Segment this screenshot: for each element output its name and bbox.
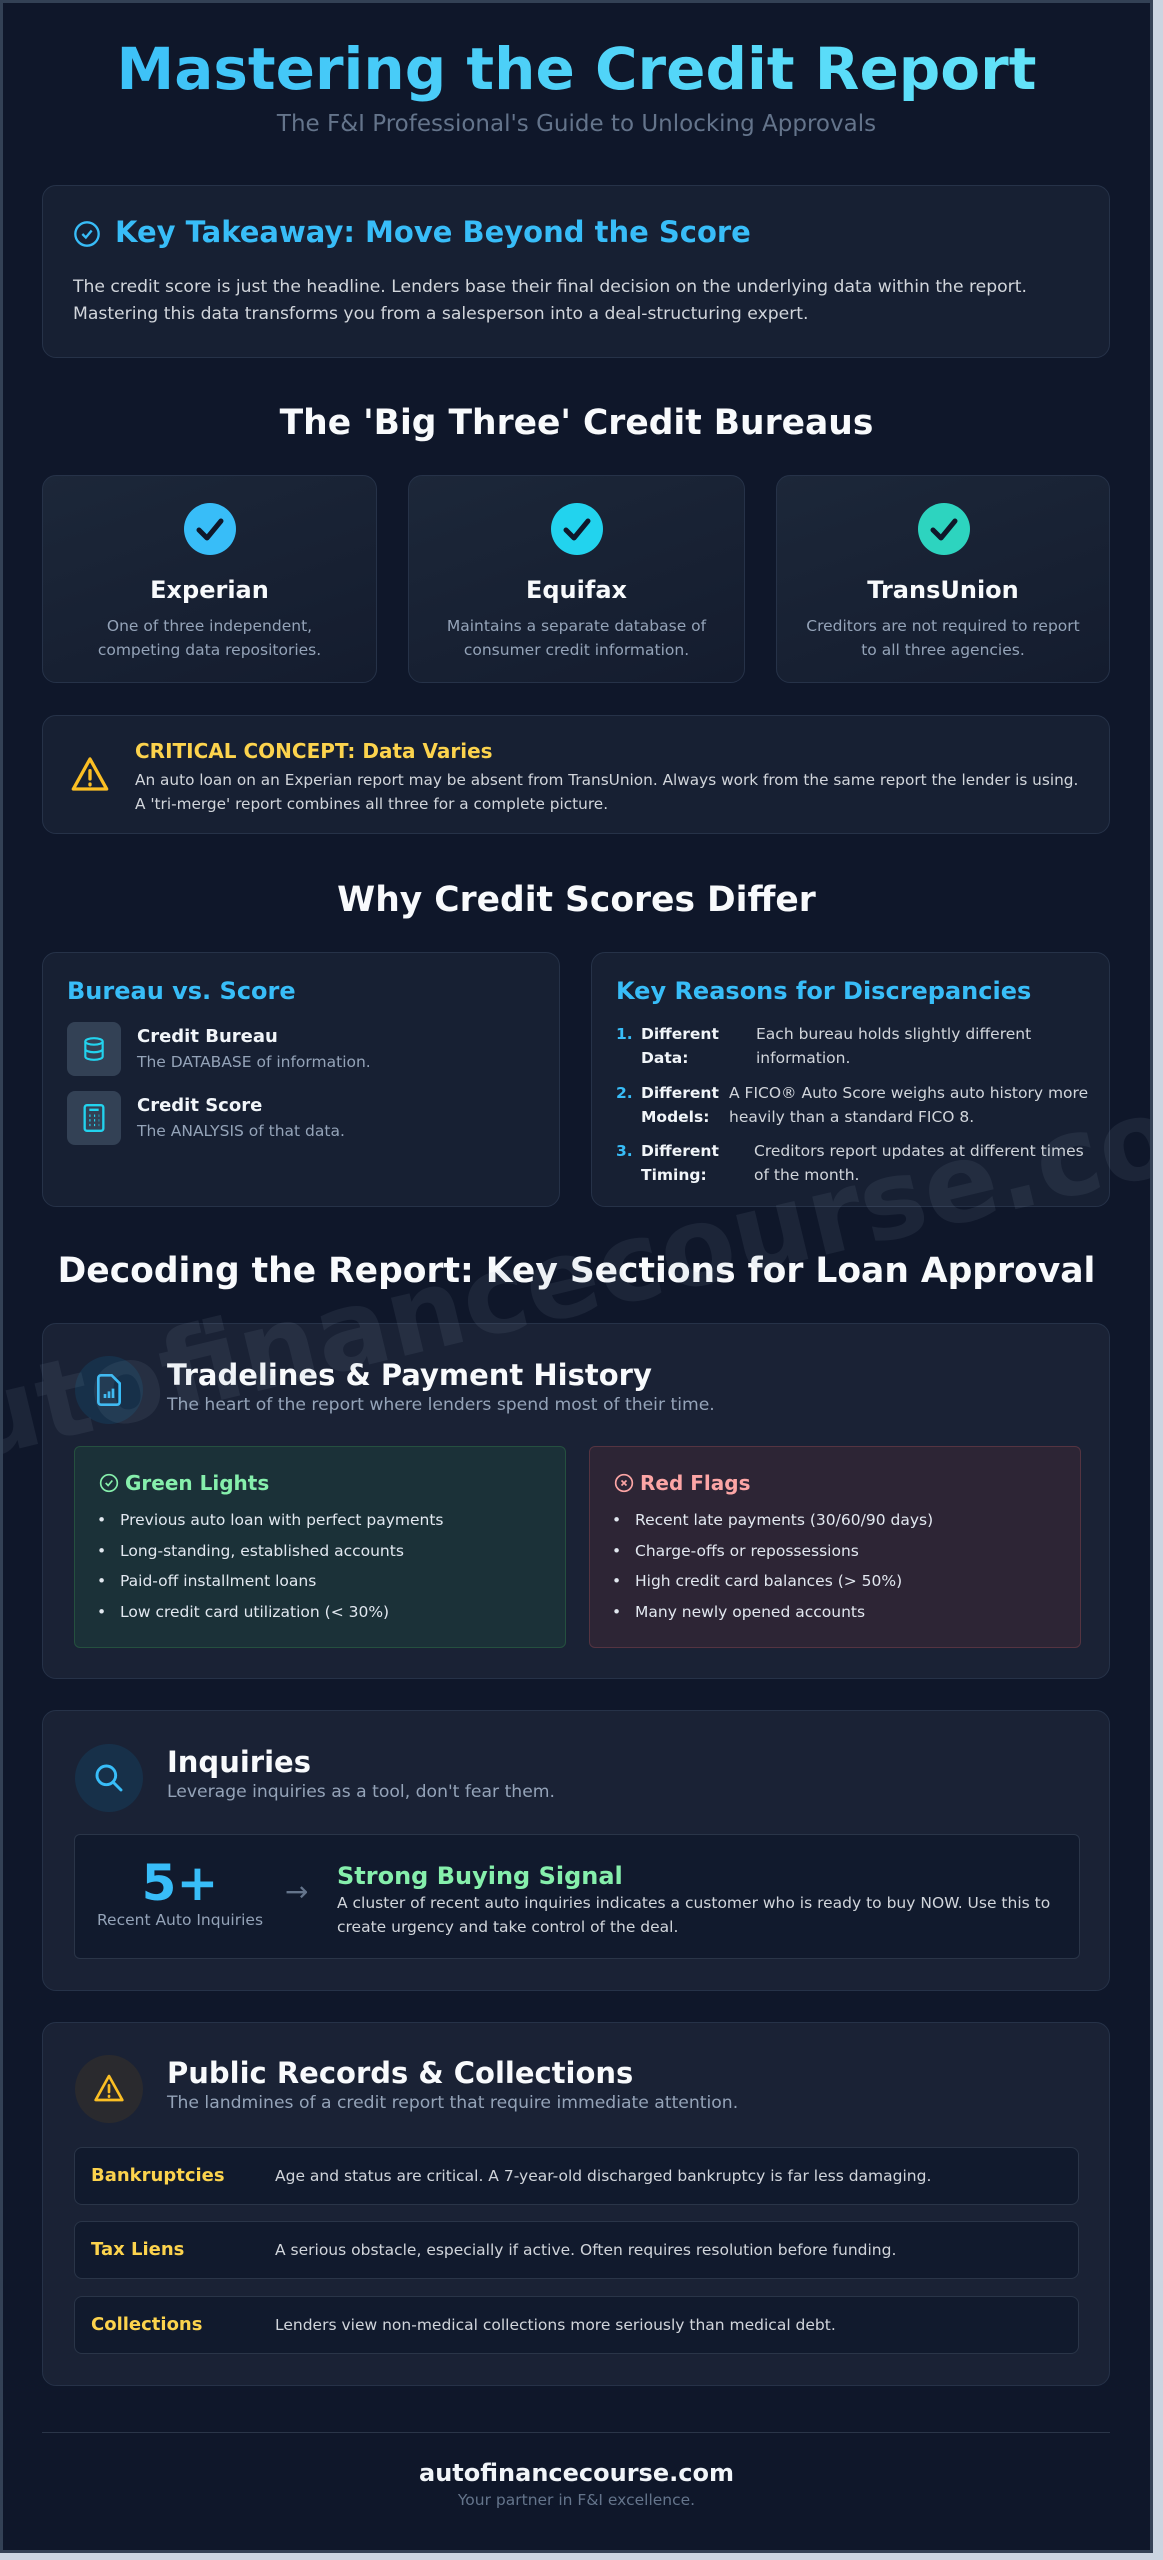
heading: why scores differ: Why Credit Scores Differ (337, 880, 816, 920)
arrow: → (285, 1875, 308, 1908)
panel: transunion (776, 475, 1110, 683)
reason 3: Different (641, 1142, 719, 1160)
desc: One of three independent, (107, 617, 312, 635)
list: Paid-off installment loans (120, 1572, 316, 1590)
reason 3 (616, 1142, 1084, 1184)
list: Recent late payments (30/60/90 days) (635, 1511, 933, 1529)
callout: critical concept (42, 715, 1110, 834)
list: Charge-offs or repossessions (635, 1542, 859, 1560)
callout: buying signal (74, 1834, 1080, 1959)
subtitle: The landmines of a credit report that require immediate attention. (167, 2093, 738, 2113)
text (135, 771, 1078, 813)
heading: decoding: Decoding the Report: Key Sections for Loan Approval (58, 1251, 1095, 1291)
icon: check (551, 503, 603, 555)
heading: Key Takeaway: Move Beyond the Score (115, 215, 751, 249)
heading: Key Reasons for Discrepancies (616, 977, 1031, 1005)
list (614, 1511, 933, 1620)
subtitle: Leverage inquiries as a tool, don't fear them. (167, 1782, 555, 1802)
icon: calculator (67, 1091, 121, 1145)
row: bankruptcies (74, 2147, 1079, 2205)
reason 1 (616, 1025, 1031, 1067)
stat: 5+ (97, 1854, 263, 1929)
subtitle: The heart of the report where lenders spend most of their time. (167, 1395, 715, 1415)
item: credit bureau: Credit Bureau (137, 1026, 278, 1047)
reason 1: Each bureau holds slightly different (756, 1025, 1031, 1043)
reason 2: heavily than a standard FICO 8. (729, 1108, 974, 1126)
item: credit score: Credit Score (137, 1095, 262, 1116)
name: Equifax (526, 576, 627, 604)
icon: database (67, 1022, 121, 1076)
desc: consumer credit information. (464, 641, 689, 659)
list: Long-standing, established accounts (120, 1542, 404, 1560)
list: Many newly opened accounts (635, 1602, 865, 1620)
reason 1: information. (756, 1049, 850, 1067)
desc (447, 617, 706, 659)
panel: tradelines (42, 1323, 1110, 1679)
reason 2 (616, 1084, 1088, 1126)
panel: green lights (74, 1446, 566, 1648)
list: Low credit card utilization (< 30%) (120, 1602, 389, 1620)
heading: Red Flags (640, 1471, 750, 1495)
row: tax liens (74, 2221, 1079, 2279)
panel: experian (42, 475, 377, 683)
subtitle: The F&I Professional's Guide to Unlocking Approvals (277, 111, 876, 137)
heading: big three: The 'Big Three' Credit Bureaus (280, 403, 873, 443)
reason 1: Data: (641, 1049, 688, 1067)
reason 1: 1. (616, 1025, 633, 1043)
panel: key takeaway (42, 185, 1110, 358)
row: collections (74, 2296, 1079, 2354)
desc (98, 617, 321, 659)
text: An auto loan on an Experian report may be absent from TransUnion. Always work from the same report the lender is using. (135, 771, 1078, 789)
reason 2: Models: (641, 1108, 709, 1126)
list (99, 1511, 443, 1620)
heading: Bureau vs. Score (67, 977, 296, 1005)
list: High credit card balances (> 50%) (635, 1572, 902, 1590)
icon: check (918, 503, 970, 555)
row: collections: Collections (91, 2314, 202, 2335)
title: Public Records & Collections (167, 2056, 633, 2090)
reason 2: 2. (616, 1084, 633, 1102)
item: credit score: The ANALYSIS of that data. (137, 1122, 345, 1140)
panel: equifax (408, 475, 745, 683)
panel: bureau vs score (42, 952, 560, 1207)
icon: check circle (74, 221, 100, 247)
footer (419, 2459, 734, 2509)
title: CRITICAL CONCEPT: Data Varies (135, 739, 493, 763)
reason 2: A FICO® Auto Score weighs auto history more (729, 1084, 1088, 1102)
desc: competing data repositories. (98, 641, 321, 659)
list: Previous auto loan with perfect payments (120, 1511, 443, 1529)
icon: document chart (75, 1356, 143, 1424)
reason 2: Different (641, 1084, 719, 1102)
reason 3: Timing: (641, 1166, 707, 1184)
panel: red flags (589, 1446, 1081, 1648)
icon: warning (75, 2055, 143, 2123)
text: The credit score is just the headline. Lenders base their final decision on the underlying data within the report. Mastering this data transforms you from a salesperson into a deal-structuring expert. (73, 277, 1027, 324)
desc: to all three agencies. (861, 641, 1025, 659)
reason 3: 3. (616, 1142, 633, 1160)
panel: key reasons (591, 952, 1110, 1207)
name: Experian (150, 576, 269, 604)
reason 3: of the month. (754, 1166, 859, 1184)
heading: Green Lights (125, 1471, 269, 1495)
title: Mastering the Credit Report (116, 35, 1036, 103)
title: Inquiries (167, 1745, 311, 1779)
item: credit bureau: The DATABASE of information. (137, 1053, 371, 1071)
panel: public records (42, 2022, 1110, 2386)
desc: Creditors are not required to report (806, 617, 1080, 635)
desc (806, 617, 1080, 659)
row: tax liens: A serious obstacle, especially if active. Often requires resolution before funding. (275, 2241, 896, 2259)
icon: warning (72, 757, 108, 791)
name: TransUnion (867, 576, 1019, 604)
desc: Maintains a separate database of (447, 617, 706, 635)
stat: 5+: Recent Auto Inquiries (97, 1911, 263, 1929)
reason 3: Creditors report updates at different times (754, 1142, 1084, 1160)
row: collections: Lenders view non-medical collections more seriously than medical debt. (275, 2316, 836, 2334)
panel: inquiries (42, 1710, 1110, 1991)
row: tax liens: Tax Liens (91, 2239, 184, 2260)
text: Strong Buying Signal (337, 1862, 623, 1890)
stat: 5+: 5+ (142, 1854, 218, 1912)
callout: buying signal: A cluster of recent auto inquiries indicates a customer who is ready to buy NOW. Use this to create urgency and take control of the deal. (337, 1894, 1050, 1936)
row: bankruptcies: Age and status are critical. A 7-year-old discharged bankruptcy is far less damaging. (275, 2167, 931, 2185)
text: A 'tri-merge' report combines all three for a complete picture. (135, 795, 608, 813)
icon: check (184, 503, 236, 555)
title: Tradelines & Payment History (167, 1358, 652, 1392)
reason 1: Different (641, 1025, 719, 1043)
footer: Your partner in F&I excellence. (458, 2491, 695, 2509)
row: bankruptcies: Bankruptcies (91, 2165, 225, 2186)
item: credit score (67, 1091, 345, 1145)
footer: autofinancecourse.com (419, 2459, 734, 2487)
item: credit bureau (67, 1022, 371, 1076)
icon: search (75, 1744, 143, 1812)
